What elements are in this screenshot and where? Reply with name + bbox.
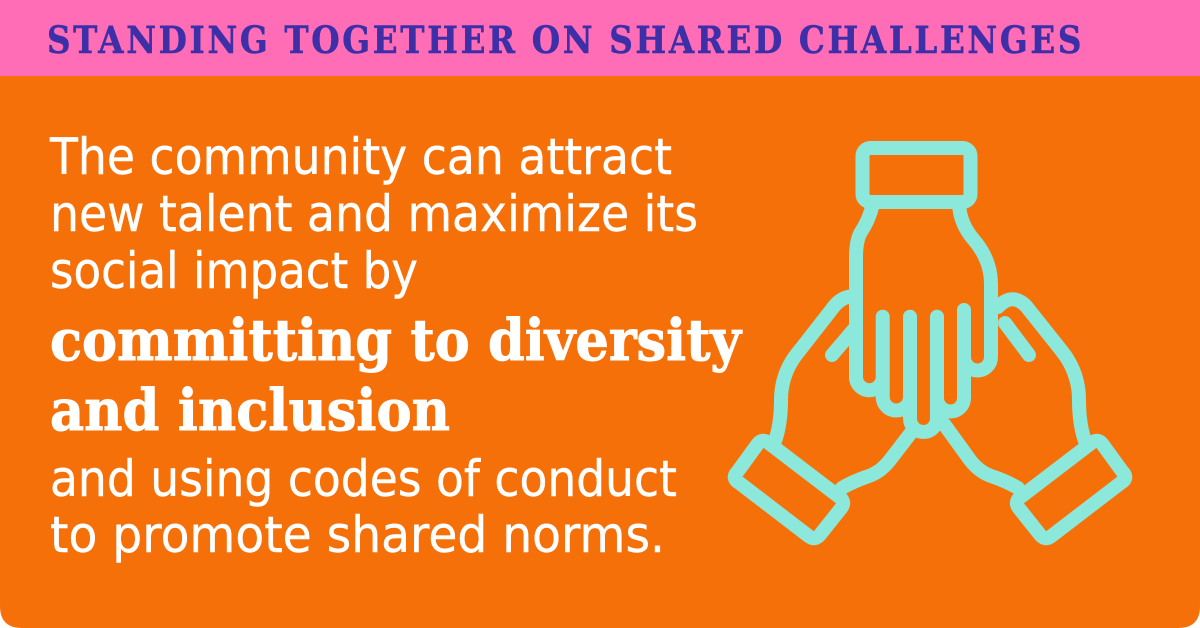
- text block: main message: to promote shared norms.: [50, 506, 665, 564]
- heading band: [0, 0, 1200, 76]
- text block: main message: social impact by: [50, 242, 418, 300]
- text block: main message: [49, 128, 743, 564]
- icon: left cuff: [735, 441, 843, 538]
- emphasis: diversity and inclusion: and inclusion: [50, 377, 450, 444]
- icon: right cuff: [1017, 441, 1125, 538]
- text block: main message: and using codes of conduct: [50, 450, 677, 508]
- icon: three joined hands: [735, 148, 1125, 538]
- icon: top hand: [856, 204, 991, 432]
- text block: main message: The community can attract: [49, 128, 672, 186]
- text block: main message: new talent and maximize its: [50, 185, 698, 243]
- icon: left hand: [775, 296, 910, 488]
- emphasis: diversity and inclusion: [50, 307, 743, 444]
- title: STANDING TOGETHER ON SHARED CHALLENGES: [47, 18, 1084, 62]
- icon: right hand: [944, 299, 1085, 488]
- icon: top cuff: [862, 148, 970, 202]
- emphasis: diversity and inclusion: committing to diversity: [50, 307, 743, 374]
